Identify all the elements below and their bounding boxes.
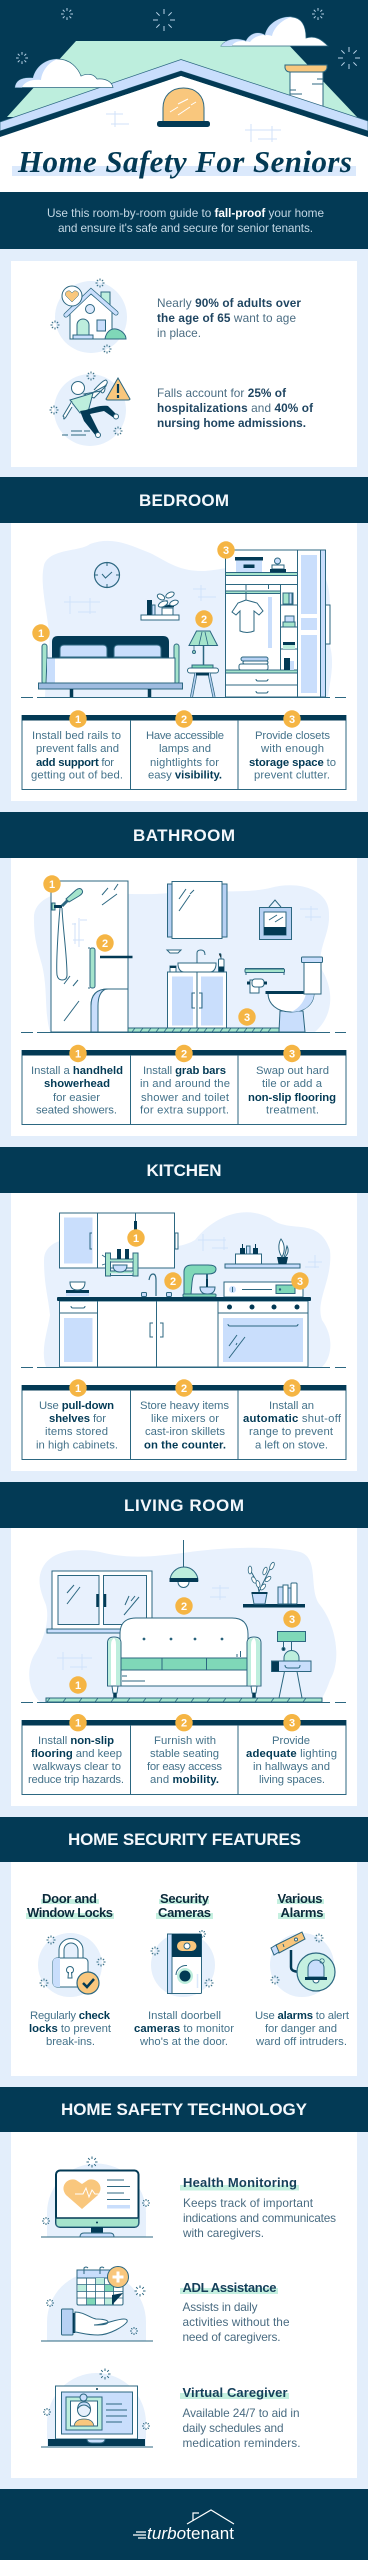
technology: health monitoring [41,2156,336,2240]
pendant lamp [170,1540,198,1588]
panel: bathroom [11,858,357,1136]
bathroom illustration [21,881,346,1032]
technology: ADL assistance: ADL Assistance [182,2280,276,2295]
tip 1: getting out of bed. [31,770,123,782]
heading: bedroom [0,477,368,523]
tip 3 [249,730,336,782]
base cabinets [60,1301,308,1367]
intro band: and ensure it's safe and secure for senior tenants. [58,221,313,235]
sofa [108,1618,261,1698]
tip 1 [28,1735,124,1786]
tip 2 [140,1400,229,1452]
tip 1: items stored [45,1426,108,1438]
feature: door and window locks: Door and [42,1891,97,1906]
panel: statistics [11,261,357,467]
footer [0,2489,368,2560]
attic window [157,88,210,127]
tip 1: shelves for [49,1413,106,1425]
tip 2: Have accessible [146,730,224,742]
tip 1: Install a handheld [31,1065,123,1077]
text: stat two: nursing home admissions. [157,416,306,430]
closet [226,550,330,697]
panel: kitchen [11,1193,357,1471]
tip 2 [147,1735,222,1786]
text: stat one: Nearly 90% of adults over [157,296,301,310]
tip 1: showerhead [44,1078,110,1090]
floor [21,1032,346,1034]
tip 1: Use pull-down [39,1400,114,1412]
wall shelf [198,1234,322,1268]
text: stat two: Falls account for 25% of [157,386,286,400]
tip 2: shower and toilet [141,1092,230,1104]
technology: health monitoring: with caregivers. [182,2226,264,2240]
panel: bedroom [11,523,357,801]
tip 2: Install grab bars [143,1065,226,1077]
feature: various alarms [255,1891,350,2048]
living room illustration [21,1540,346,1702]
heading: bathroom [0,812,368,858]
tip 3: Install an [269,1400,314,1412]
window [47,1571,152,1633]
technology: ADL assistance: need of caregivers. [182,2330,280,2344]
tips table: living room [22,1714,346,1795]
heading: home safety technology [0,2087,368,2132]
tip 2: Furnish with [154,1735,216,1747]
technology: ADL assistance: Assists in daily [182,2300,258,2314]
tip 1: seated showers. [36,1104,117,1116]
feature: various alarms: Alarms [280,1905,324,1920]
rug [46,1698,322,1702]
cloud left [15,59,113,88]
tip 2: easy visibility. [148,770,222,782]
technology: health monitoring: Health Monitoring [183,2175,297,2190]
house wall [0,76,368,192]
heading: home security features: HOME SECURITY FEATURES [68,1830,301,1849]
feature: various alarms: ward off intruders. [255,2036,347,2048]
lamp [188,631,218,697]
floor [21,1702,346,1704]
chimney [285,65,327,108]
feature: door and window locks: Window Locks [27,1905,113,1920]
heading: living room: LIVING ROOM [124,1496,244,1515]
tip 3: tile or add a [262,1078,323,1090]
floor [21,696,346,698]
shelf with plant [141,591,179,620]
text: stat one [157,296,301,340]
bedroom illustration [21,541,346,698]
side table with lamp [272,1632,311,1698]
feature: security cameras [134,1891,234,2048]
towel rack and paper [245,968,284,993]
marker badges [32,541,235,642]
panel: home safety technology [11,2132,357,2478]
tip 1: Install non-slip [38,1735,114,1747]
intro band: Use this room-by-room guide to fall-proof your home [47,206,324,220]
stars [16,8,360,69]
tip 1: in high cabinets. [36,1440,118,1452]
tip 1: flooring and keep [31,1748,122,1760]
tip 3: in hallways and [253,1761,330,1773]
marker badges [69,1597,301,1694]
tip 1: prevent falls and [36,743,119,755]
feature: door and window locks: locks to prevent [29,2023,112,2035]
marker badges [127,1229,309,1290]
tip 3: Provide closets [255,730,330,742]
tip 3: automatic shut-off [243,1413,342,1425]
tip 2: on the counter. [144,1440,226,1452]
feature: security cameras: who's at the door. [139,2036,228,2048]
tip 3: living spaces. [259,1774,325,1786]
tip 1: Install bed rails to [32,730,121,742]
heading: bedroom: BEDROOM [139,491,229,510]
tip 3: range to prevent [249,1426,334,1438]
icon: house with heart [50,278,127,354]
wall marks [300,906,321,921]
feature: various alarms: for danger and [265,2023,337,2035]
tips table: bedroom [22,710,346,790]
roof front bands [0,60,368,131]
tip 3 [248,1065,336,1116]
technology: virtual caregiver [41,2368,300,2450]
technology: health monitoring: indications and communicates [183,2211,336,2225]
non-slip floor [128,1028,279,1032]
picture frame [260,900,292,940]
vanity [167,950,226,1032]
shower [51,881,132,1032]
heading: living room [0,1482,368,1528]
header: house roof illustration [0,0,368,137]
tip 2 [146,730,224,782]
feature: security cameras: Security [160,1891,210,1906]
icon: falling person with warning [50,372,130,446]
heading: home security features [0,1817,368,1862]
icon: padlock [38,1933,106,1997]
heading: kitchen: KITCHEN [146,1161,222,1180]
feature: door and window locks: break-ins. [46,2036,95,2048]
logo: turbotenant [133,2510,234,2543]
icon: monitor with heart [41,2156,153,2237]
tip 2: and mobility. [150,1774,219,1786]
tip 2 [140,1065,230,1116]
technology: virtual caregiver: Virtual Caregiver [182,2385,288,2400]
heading: home safety technology: HOME SAFETY TECHNOLOGY [61,2100,308,2119]
icon: doorbell camera [150,1930,215,1997]
technology: virtual caregiver: Available 24/7 to aid in [182,2406,300,2420]
tip 1: for easier [53,1092,100,1104]
panel: living room [11,1528,357,1806]
tip 2: nightlights for [150,757,219,769]
heading: kitchen [0,1147,368,1193]
tip 2: like mixers or [151,1413,219,1425]
wall brick marks [106,111,281,142]
feature: security cameras: Cameras [158,1905,211,1920]
wall marks [64,585,216,614]
intro band [0,192,368,249]
technology: virtual caregiver: daily schedules and [182,2421,284,2435]
tips table: kitchen [22,1379,346,1460]
pull-down shelf [102,1249,138,1276]
text: stat two: hospitalizations and 40% of [157,401,313,415]
tip 1 [36,1400,118,1452]
tip 2: Store heavy items [140,1400,229,1412]
tip 3: with enough [260,743,324,755]
stove controls [224,1282,303,1297]
tips table: bathroom [22,1045,346,1125]
tip 2: cast-iron skillets [145,1426,225,1438]
title: Home Safety For Seniors [17,144,352,179]
tip 3: a left on stove. [255,1440,328,1452]
marker badges [43,875,256,1026]
cloud right [221,17,328,46]
icon: alarm camera and bell [270,1932,335,1997]
bowl and tray [66,1282,89,1296]
kitchen illustration [21,1212,346,1368]
technology: virtual caregiver: medication reminders. [182,2436,300,2450]
tip 3: Swap out hard [256,1065,329,1077]
feature: various alarms: Use alarms to alert [255,2010,350,2022]
tip 1 [31,730,123,782]
tip 2: stable seating [150,1748,219,1760]
tip 3: adequate lighting [246,1748,337,1760]
text: stat one: the age of 65 want to age [157,311,296,325]
clock [94,562,120,588]
feature: security cameras: Install doorbell [148,2010,221,2022]
floor [21,1366,346,1368]
mixer [183,1265,216,1297]
tip 2: lamps and [159,743,211,755]
tip 3 [243,1400,342,1452]
feature: door and window locks [26,1891,114,2048]
tip 1: walkways clear to [32,1761,121,1773]
feature: door and window locks: Regularly check [30,2010,111,2022]
feature: security cameras: cameras to monitor [134,2023,234,2035]
technology: ADL assistance [41,2266,290,2344]
tip 3: treatment. [266,1104,319,1116]
wall shelf with plant and books [243,1562,305,1608]
tip 2: for easy access [147,1761,222,1773]
upper cabinets [60,1213,178,1268]
text: stat one: in place. [157,326,201,340]
panel: home security features [11,1862,357,2076]
tip 3: storage space to [249,757,336,769]
tip 1: add support for [36,757,114,769]
technology: health monitoring: Keeps track of important [183,2196,314,2210]
tip 3: non-slip flooring [248,1092,336,1104]
toilet [266,957,322,1032]
icon: calendar over hand [41,2266,153,2341]
faucet and knobs [142,1274,172,1296]
wall marks [57,1585,229,1670]
tip 1 [31,1065,123,1116]
tip 3: prevent clutter. [254,770,330,782]
mirror [168,882,227,938]
tip 3 [246,1735,337,1786]
back roof [7,41,357,117]
icon: laptop with caregiver [41,2368,153,2447]
text: stat two [157,386,313,430]
logo: turbotenant: turbotenant [147,2524,234,2543]
counter [57,1297,311,1301]
bed [38,636,182,697]
tip 2: in and around the [140,1078,230,1090]
tip 1: reduce trip hazards. [28,1774,124,1786]
tip 2: for extra support. [140,1104,229,1116]
heading: bathroom: BATHROOM [133,826,235,845]
feature: various alarms: Various [278,1891,322,1906]
tip 3: Provide [272,1735,310,1747]
technology: ADL assistance: activities without the [182,2315,290,2329]
